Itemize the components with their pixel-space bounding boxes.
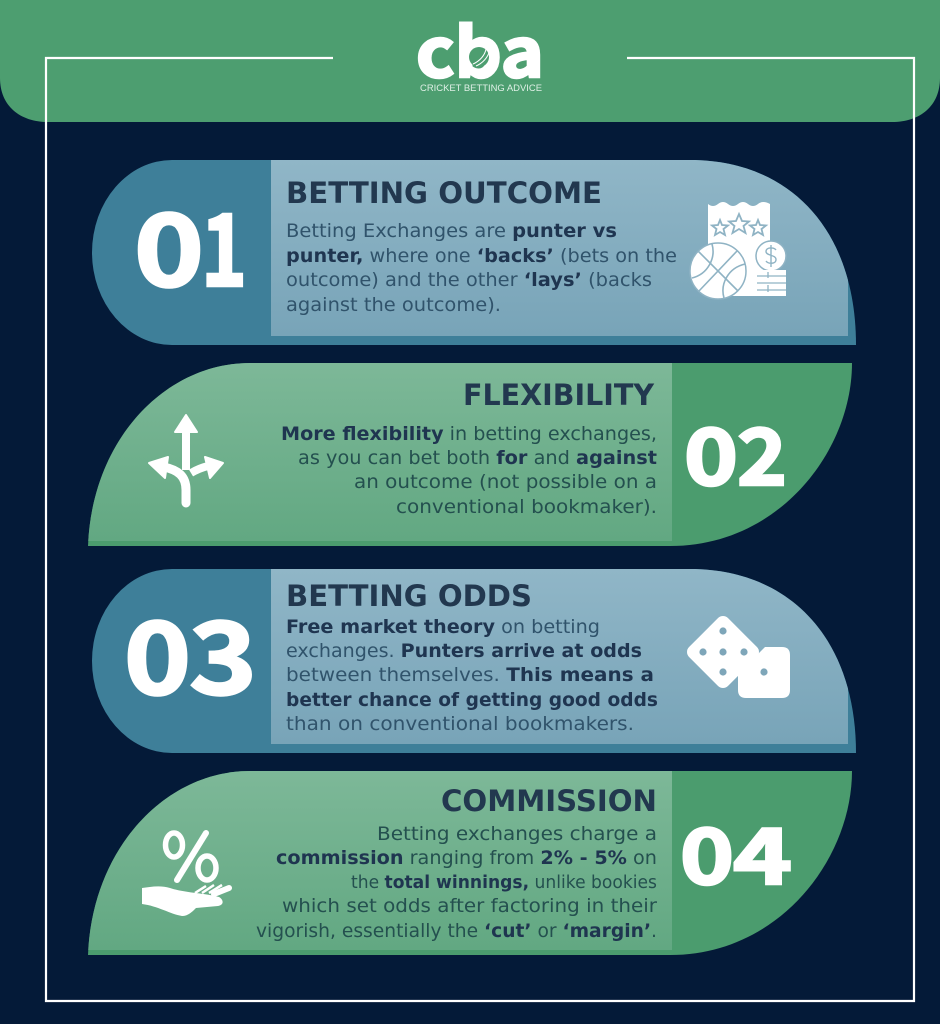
number 04 — [680, 796, 792, 907]
body text: conventional bookmaker). — [396, 496, 657, 518]
icon: diverging arrows — [149, 415, 223, 503]
body text: between themselves. This means a — [286, 664, 654, 686]
body text: than on conventional bookmakers. — [286, 713, 634, 735]
number 02: 0 — [684, 396, 738, 508]
body text: as you can bet both for and against — [298, 447, 657, 469]
body text: Betting Exchanges are punter vs — [286, 220, 617, 242]
heading: BETTING OUTCOME — [286, 176, 602, 210]
number 01 — [134, 170, 247, 315]
header band — [0, 0, 940, 122]
panel: 04 commission — [88, 771, 852, 955]
number 01: 1 — [201, 170, 247, 315]
number 03: 3 — [189, 578, 257, 723]
logo tagline: CRICKET BETTING ADVICE — [420, 83, 542, 94]
body text: vigorish, essentially the ‘cut’ or ‘margin’. — [256, 920, 657, 942]
number 01: 0 — [134, 170, 204, 315]
body text — [281, 423, 657, 518]
number 04: 4 — [733, 796, 792, 907]
body text — [256, 823, 657, 942]
body text — [286, 616, 658, 735]
number 02 — [684, 396, 787, 508]
heading: BETTING ODDS — [286, 579, 532, 613]
body text: punter, where one ‘backs’ (bets on the — [286, 245, 677, 267]
body text: More flexibility in betting exchanges, — [281, 423, 657, 445]
body text: outcome) and the other ‘lays’ (backs — [286, 269, 652, 291]
heading: FLEXIBILITY — [463, 378, 655, 412]
number 04: 0 — [680, 796, 734, 907]
logo: cba — [416, 0, 544, 97]
number 02: 2 — [737, 396, 787, 508]
body text: better chance of getting good odds — [286, 689, 658, 711]
panel: 01 betting outcome — [92, 160, 856, 345]
body text: Betting exchanges charge a — [377, 823, 657, 845]
body text: against the outcome). — [286, 294, 501, 316]
body text: commission ranging from 2% - 5% on — [276, 847, 657, 869]
heading: COMMISSION — [441, 784, 657, 818]
body text: Free market theory on betting — [286, 616, 600, 638]
icon: percent over open hand — [142, 833, 229, 916]
body text: which set odds after factoring in their — [282, 895, 657, 917]
body text: exchanges. Punters arrive at odds — [286, 640, 642, 662]
panel: 02 flexibility — [88, 363, 852, 546]
panel: 03 betting odds — [92, 569, 856, 753]
icon: dice — [684, 613, 790, 698]
icon: cricket ball — [469, 47, 489, 67]
icon: betting slip, ball and coins — [690, 202, 786, 299]
body text: the total winnings, unlike bookies — [351, 872, 657, 893]
body text — [286, 220, 677, 316]
number 03 — [124, 578, 257, 723]
number 03: 0 — [124, 578, 191, 723]
body text: an outcome (not possible on a — [354, 471, 657, 493]
